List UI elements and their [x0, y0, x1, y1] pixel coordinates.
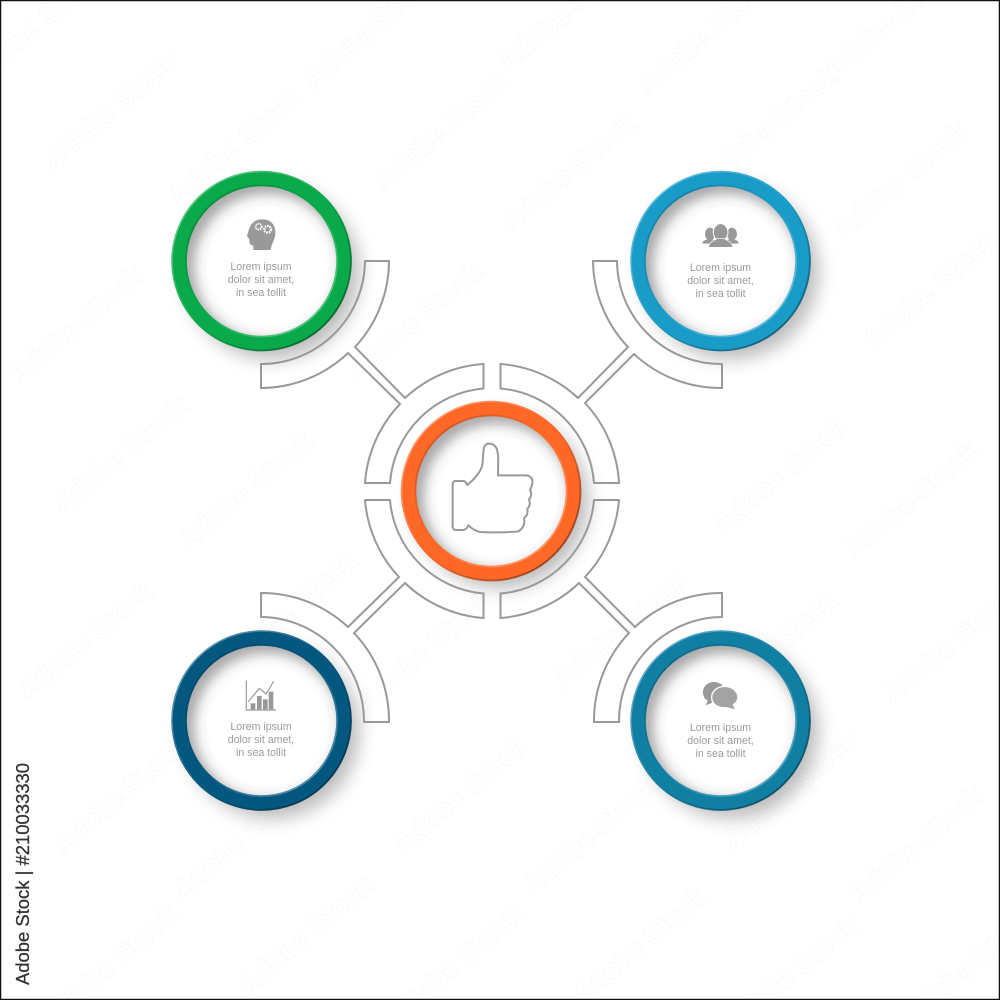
watermark pattern: Adobe Stock: [172, 425, 319, 555]
watermark pattern: Adobe Stock: [352, 585, 499, 715]
text: bottom left label: dolor sit amet,: [228, 734, 294, 746]
watermark pattern: Adobe Stock: [2, 260, 149, 390]
watermark pattern: Adobe Stock: [517, 770, 664, 900]
icon: head with gears: [247, 219, 275, 250]
watermark pattern: Adobe Stock: [495, 108, 642, 238]
panel: top left green ring: [172, 172, 351, 350]
watermark pattern: Adobe Stock: [697, 60, 844, 190]
connector outline: top left: [261, 261, 484, 483]
text: top left label: Lorem ipsum: [230, 261, 292, 273]
watermark pattern: Adobe Stock: [368, 66, 515, 196]
watermark pattern: Adobe Stock: [547, 565, 694, 695]
watermark pattern: Adobe Stock: [47, 730, 194, 860]
panel: top right blue ring: [631, 172, 810, 350]
text: top left label: in sea tollit: [236, 287, 286, 299]
watermark pattern: Adobe Stock: [387, 730, 534, 860]
text: bottom left label: in sea tollit: [236, 747, 286, 759]
icon: thumbs up: [453, 444, 532, 532]
watermark pattern: Adobe Stock: [697, 585, 844, 715]
stock id caption: Adobe Stock | #210033330: [13, 763, 33, 985]
text: bottom left label: Lorem ipsum: [230, 721, 292, 733]
icon: group of people: [702, 224, 739, 247]
watermark pattern: Adobe Stock: [857, 225, 1000, 355]
connector outline: top right: [500, 261, 722, 483]
watermark pattern: Adobe Stock: [167, 775, 314, 905]
panel: bottom right teal ring: [631, 631, 810, 810]
watermark pattern: Adobe Stock: [717, 725, 864, 855]
text: top right label: in sea tollit: [695, 288, 746, 300]
watermark pattern: Adobe Stock: [12, 575, 159, 705]
text: top right label: Lorem ipsum: [690, 262, 751, 274]
icon: bar chart with trend line: [246, 681, 276, 710]
watermark pattern: Adobe Stock: [47, 390, 194, 520]
text: top left label: dolor sit amet,: [228, 274, 294, 286]
watermark pattern: Adobe Stock: [707, 410, 854, 540]
ring drop shadows: [185, 185, 818, 818]
icon: speech bubbles: [703, 682, 738, 710]
watermark pattern: Adobe Stock: [37, 45, 184, 175]
watermark pattern: Adobe Stock: [232, 870, 379, 1000]
white discs: [182, 181, 800, 800]
watermark pattern: Adobe Stock: [342, 255, 489, 385]
panel: bottom left navy ring: [172, 631, 351, 810]
text: bottom right label: dolor sit amet,: [687, 735, 754, 747]
watermark pattern: Adobe Stock: [162, 80, 309, 210]
watermark pattern: Adobe Stock: [217, 545, 364, 675]
text: bottom right label: in sea tollit: [695, 748, 746, 760]
panel: central orange ring: [402, 402, 580, 580]
connector outline: bottom left: [261, 500, 484, 722]
watermark pattern: Adobe Stock: [842, 780, 989, 910]
text: top right label: dolor sit amet,: [687, 275, 754, 287]
watermark pattern: Adobe Stock: [827, 115, 974, 245]
watermark pattern: Adobe Stock: [837, 435, 984, 565]
text: bottom right label: Lorem ipsum: [690, 722, 751, 734]
connector outline: bottom right: [500, 500, 722, 722]
